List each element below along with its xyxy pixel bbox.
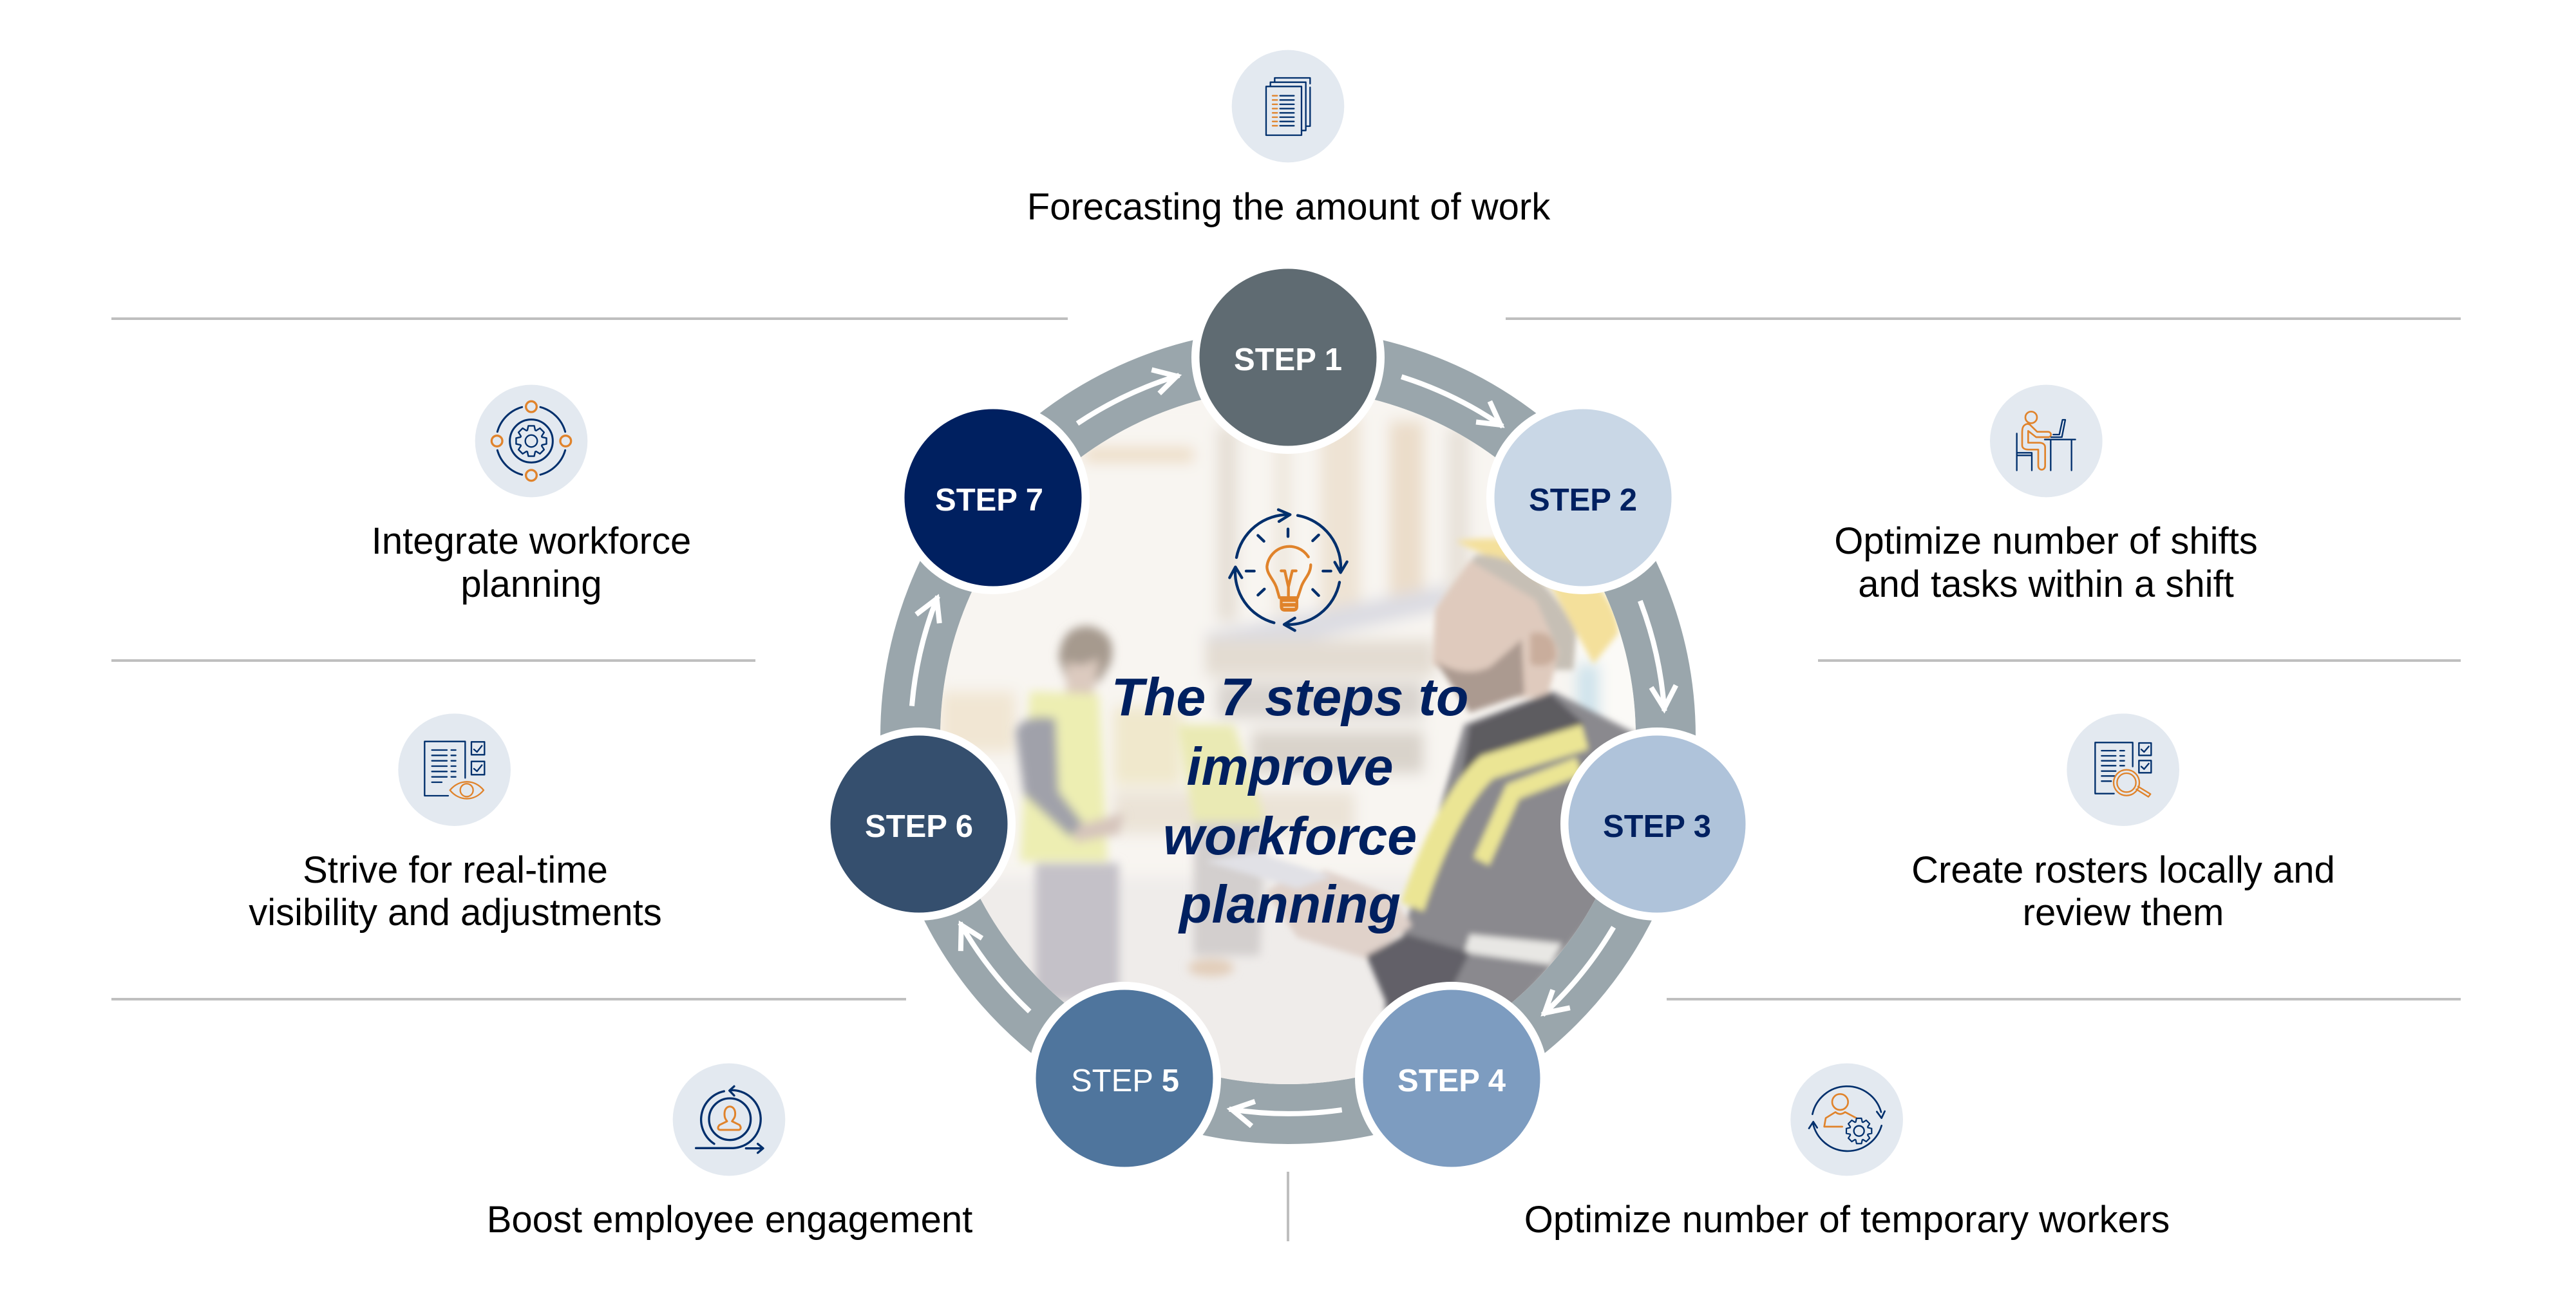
step 2 node <box>1486 401 1680 594</box>
step 5 node: STEP 5 <box>1071 1064 1179 1098</box>
label: rosters: review them <box>2023 892 2224 934</box>
icon: employee engagement <box>673 1064 785 1176</box>
title <box>1112 668 1468 934</box>
step 1 node: STEP 1 <box>1234 343 1342 377</box>
step 2 node: STEP 2 <box>1529 483 1637 518</box>
label: real-time visibility <box>249 849 662 934</box>
arrow: step 2 to step 3 <box>1604 603 1701 708</box>
arrow: step 7 to step 1 <box>1079 346 1177 452</box>
label: engagement: Boost employee engagement <box>487 1199 972 1241</box>
icon: person at desk <box>1990 385 2103 497</box>
label: temporary workers: Optimize number of temporary workers <box>1524 1199 2170 1241</box>
label: forecasting: Forecasting the amount of work <box>1027 186 1551 228</box>
step 5 node <box>1028 982 1221 1175</box>
title: planning <box>1178 875 1401 934</box>
arrow: step 5 to step 6 <box>941 925 1048 1009</box>
label: rosters <box>1911 849 2335 934</box>
title: workforce <box>1163 807 1417 866</box>
label: rosters: Create rosters locally and <box>1911 849 2335 891</box>
label: optimize shifts: Optimize number of shifts <box>1834 520 2258 562</box>
icon: light bulb in cycle <box>1229 510 1347 630</box>
step 4 node: STEP 4 <box>1397 1064 1506 1098</box>
label: optimize shifts <box>1834 520 2258 605</box>
arrow: step 4 to step 5 <box>1232 1067 1340 1152</box>
arrow: step 3 to step 4 <box>1544 919 1613 1024</box>
icon: document with magnifier <box>2067 713 2179 826</box>
central photo of warehouse workers <box>940 400 1636 1084</box>
step 3 node: STEP 3 <box>1603 809 1711 844</box>
title: The 7 steps to <box>1112 668 1468 727</box>
arrow: step 6 to step 7 <box>891 599 958 704</box>
label: optimize shifts: and tasks within a shift <box>1858 563 2234 605</box>
icon: forecasting documents <box>1232 50 1344 162</box>
cycle ring <box>911 359 1665 1114</box>
icon: temporary workers <box>1790 1064 1903 1176</box>
title: improve <box>1187 737 1393 796</box>
flow arrows between steps <box>891 346 1701 1152</box>
label: integrate: planning <box>460 563 602 605</box>
step 3 node <box>1560 728 1754 921</box>
step 4 node <box>1355 982 1548 1175</box>
step 1 node <box>1191 261 1385 454</box>
label: integrate: Integrate workforce <box>372 520 691 562</box>
label: real-time visibility: visibility and adjustments <box>249 892 662 934</box>
label: real-time visibility: Strive for real-time <box>303 849 608 891</box>
step 7 node: STEP 7 <box>935 483 1043 518</box>
divider lines <box>111 319 2461 1241</box>
step 6 node: STEP 6 <box>865 809 973 844</box>
icon: document with eye <box>398 713 511 826</box>
step 6 node <box>822 728 1016 921</box>
arrow: step 1 to step 2 <box>1404 377 1501 425</box>
label: integrate <box>372 520 691 605</box>
icon: integrate gear <box>475 385 587 497</box>
step 7 node <box>896 401 1090 594</box>
